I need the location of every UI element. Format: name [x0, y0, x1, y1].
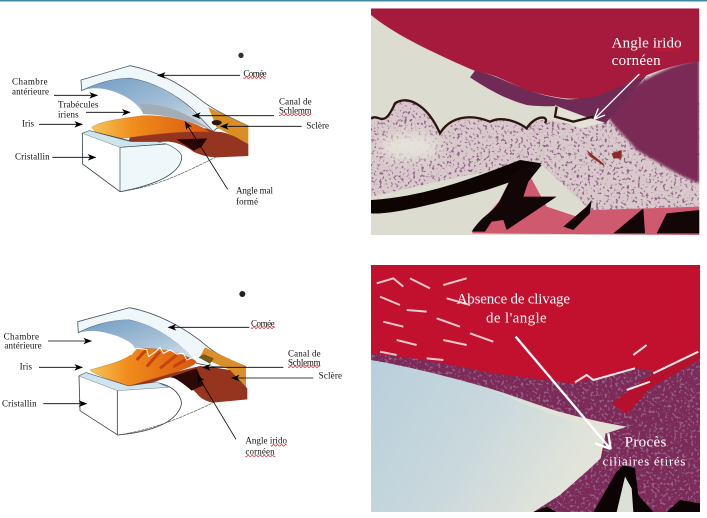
iris fringes [131, 347, 197, 362]
iris light centre [380, 133, 440, 160]
label: Angle irido cornéen: Angle irido [245, 436, 287, 446]
lens edge [116, 391, 119, 435]
label: Canal de Schlemm: Schlemm [279, 106, 312, 116]
crystalline lens [82, 131, 182, 192]
sclera yellow [200, 347, 246, 392]
zonule outline [118, 403, 213, 435]
anterior chamber [82, 78, 213, 132]
lens side shading [120, 144, 182, 192]
malformed angle recess [177, 138, 207, 151]
lens top surface [79, 373, 168, 391]
label: Angle irido cornéen: Angle irido [612, 35, 682, 51]
purple tissue underlay [371, 350, 700, 512]
label: Canal de Schlemm [193, 97, 312, 116]
diagram: malformed angle [12, 53, 329, 206]
label: Trabécules iriens: iriens [58, 110, 79, 120]
arrow: to angle [594, 74, 639, 119]
top border line [0, 0, 707, 2]
iris border [371, 100, 593, 133]
label: Trabécules iriens [58, 100, 130, 120]
label: Iris [20, 362, 82, 372]
label: Angle irido cornéen: cornéen [612, 53, 661, 69]
label: Cornée [158, 68, 267, 78]
iris [92, 116, 209, 138]
iris fibres [137, 349, 188, 368]
label: Procès ciliaires étirés: Procès [625, 435, 666, 451]
label: Chambre antérieure [4, 332, 91, 351]
Schlemm canal [199, 355, 213, 363]
background chamber [371, 8, 699, 235]
pigment epithelium [371, 160, 542, 213]
label: Cornée [168, 318, 275, 328]
collagen fibres [377, 278, 493, 360]
Schlemm canal [212, 120, 222, 125]
label: Iris: Iris [20, 362, 32, 372]
small vessels [587, 150, 622, 167]
label: Chambre antérieure [12, 77, 97, 97]
black ciliary processes [472, 163, 699, 233]
zonule outline [120, 157, 217, 192]
label: Sclère [232, 370, 342, 380]
pale cleft [555, 105, 605, 128]
lens top surface [82, 131, 167, 147]
aqueous humour [371, 360, 607, 512]
cleft slits [575, 345, 698, 390]
purple band [470, 71, 647, 124]
red wedge [612, 351, 700, 414]
dark scleral region [605, 60, 699, 183]
label: Cornée: Cornée [251, 318, 275, 328]
label: Procès ciliaires étirés [603, 435, 685, 469]
label: Iris [22, 118, 82, 128]
label: Angle irido cornéen [612, 35, 682, 69]
label: Angle irido cornéen: cornéen [245, 447, 275, 457]
cornea [81, 66, 248, 132]
label: Canal de Schlemm: Schlemm [288, 358, 321, 368]
label: Sclère: Sclère [306, 121, 329, 131]
label: Chambre antérieure: antérieure [4, 341, 42, 351]
micrograph: bottom, absence of cleavage [371, 265, 700, 512]
sclera brown [128, 366, 247, 403]
label: Angle mal formé: formé [236, 196, 258, 206]
diagram: normal angle [2, 291, 342, 457]
label: Canal de Schlemm: Canal de [288, 349, 321, 359]
micrograph: top, irido-corneal angle [371, 8, 699, 235]
cornea [78, 308, 246, 367]
label: Chambre antérieure: antérieure [12, 87, 49, 97]
label: Angle irido cornéen [197, 375, 287, 457]
label: Chambre antérieure: Chambre [12, 77, 48, 87]
label: Angle mal formé: Angle mal [236, 185, 273, 195]
label: Cornée: Cornée [243, 68, 267, 78]
label: Absence de clivage de l'angle: de l'angle [486, 310, 547, 326]
trabecular meshwork [140, 104, 213, 132]
iris [90, 348, 197, 386]
label: Absence de clivage de l'angle: Absence de clivage [457, 291, 570, 307]
black pigment [533, 465, 700, 512]
lower stroma tissue [371, 67, 699, 213]
pale recess [617, 477, 633, 512]
ciliary body pink [472, 178, 700, 235]
corneal stroma in red [371, 265, 700, 383]
label: Cristallin [15, 152, 96, 162]
sclera yellow [208, 107, 248, 144]
label: Cristallin: Cristallin [2, 398, 37, 408]
label: Angle mal formé [185, 122, 273, 206]
label: Chambre antérieure: Chambre [4, 332, 39, 342]
anterior chamber [80, 320, 197, 362]
label: Sclère [221, 121, 329, 131]
label: Cristallin [2, 398, 87, 408]
label: Iris: Iris [22, 118, 34, 128]
pale cleft [493, 390, 626, 434]
label: Trabécules iriens: Trabécules [58, 100, 99, 110]
small mark [239, 291, 245, 297]
label: Cristallin: Cristallin [15, 152, 50, 162]
arrow: to angle [516, 337, 611, 449]
label: Procès ciliaires étirés: ciliaires étirés [603, 455, 685, 469]
sclera brown [129, 128, 248, 157]
crystalline lens [79, 373, 182, 435]
angle recess [172, 368, 204, 391]
label: Canal de Schlemm: Canal de [279, 97, 312, 107]
label: Canal de Schlemm [203, 349, 321, 368]
small mark [238, 53, 244, 58]
label: Sclère: Sclère [319, 370, 342, 380]
label: Absence de clivage de l'angle [457, 291, 570, 326]
corneal stroma in red [371, 8, 699, 99]
